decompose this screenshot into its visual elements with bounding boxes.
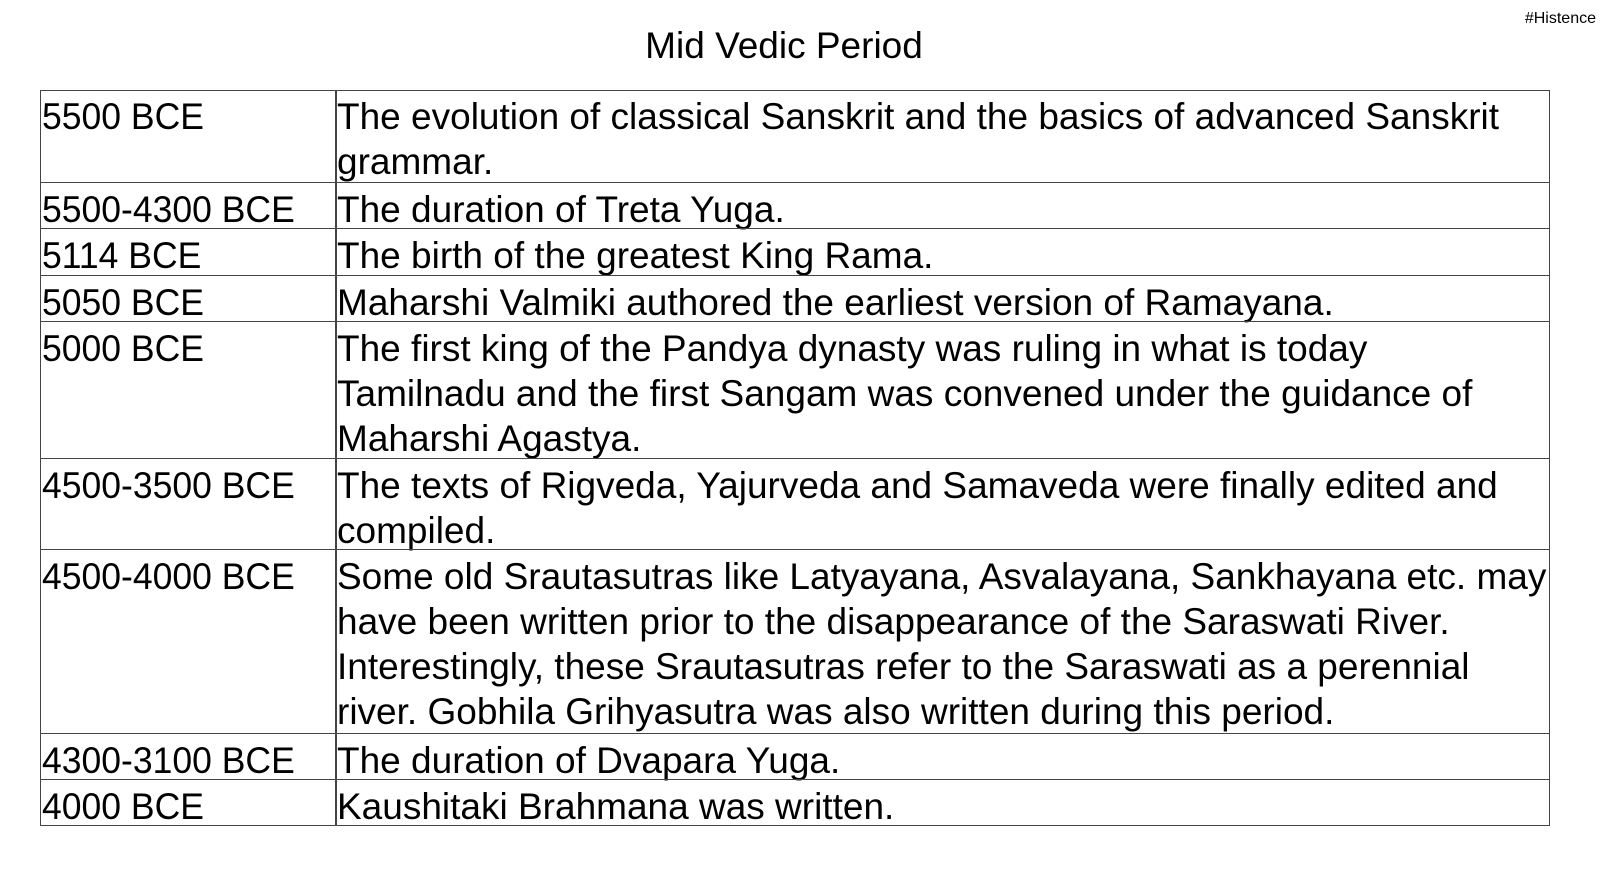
row 7: Some old Srautasutras like Latyayana, Asvalayana, Sankhayana etc. may: [337, 556, 1546, 597]
row 4: 5050 BCE: [42, 282, 204, 323]
row 2: The duration of Treta Yuga.: [337, 189, 785, 230]
row 5: Maharshi Agastya.: [337, 418, 641, 459]
row 3: The birth of the greatest King Rama.: [337, 235, 933, 276]
row 6: 4500-3500 BCE: [42, 465, 295, 506]
row 7: 4500-4000 BCE: [42, 556, 295, 597]
row 3: 5114 BCE: [42, 235, 201, 276]
row 1: grammar.: [337, 141, 493, 182]
row 9: 4000 BCE: [42, 786, 204, 827]
row 5: The first king of the Pandya dynasty was ruling in what is today: [337, 328, 1367, 369]
row 3: [40, 228, 1550, 275]
row 5: [40, 321, 1550, 459]
row 7: have been written prior to the disappearance of the Saraswati River.: [337, 601, 1450, 642]
row 4: [40, 275, 1550, 322]
row 8: 4300-3100 BCE: [42, 740, 295, 781]
row 7: river. Gobhila Grihyasutra was also written during this period.: [337, 691, 1334, 732]
row 5: Tamilnadu and the first Sangam was convened under the guidance of: [337, 373, 1472, 414]
row 6: [40, 458, 1550, 550]
column divider: [335, 91, 336, 825]
row 4: Maharshi Valmiki authored the earliest version of Ramayana.: [337, 282, 1334, 323]
row 7: Interestingly, these Srautasutras refer to the Saraswati as a perennial: [337, 646, 1470, 687]
row 7: [40, 549, 1550, 734]
table: [40, 90, 1550, 826]
row 1: The evolution of classical Sanskrit and the basics of advanced Sanskrit: [337, 96, 1499, 137]
watermark: #Histence: [1525, 10, 1596, 27]
row 9: [40, 779, 1550, 826]
row 6: compiled.: [337, 510, 495, 551]
row 8: [40, 733, 1550, 780]
row 1: [42, 96, 1499, 182]
row 2: [40, 182, 1550, 229]
row 5: 5000 BCE: [42, 328, 204, 369]
row 8: The duration of Dvapara Yuga.: [337, 740, 840, 781]
row 6: The texts of Rigveda, Yajurveda and Samaveda were finally edited and: [337, 465, 1498, 506]
title: Mid Vedic Period: [645, 25, 923, 66]
row 9: Kaushitaki Brahmana was written.: [337, 786, 894, 827]
row 1: 5500 BCE: [42, 96, 204, 137]
row 2: 5500-4300 BCE: [42, 189, 295, 230]
